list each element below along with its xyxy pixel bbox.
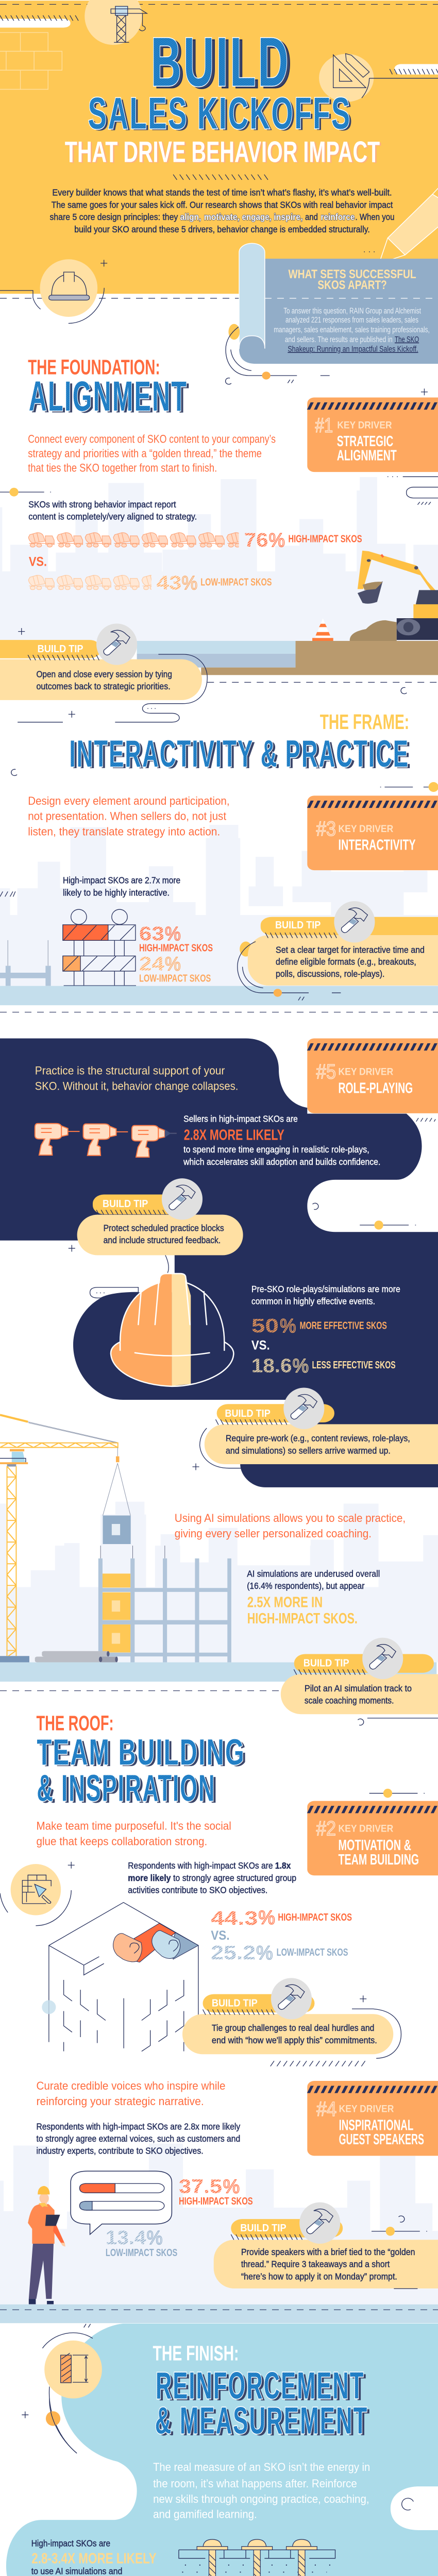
icon: screws <box>179 2539 335 2576</box>
text block: inspiration lead <box>36 2079 225 2108</box>
text block: inspiration lead: Curate credible voices who inspire while <box>36 2079 225 2092</box>
text block: external voices <box>36 2121 240 2156</box>
text block: intro: share 5 core design principles: they <box>49 212 178 222</box>
stat: 18.6 percent less effective: 18.6 <box>251 1354 292 1376</box>
illustration: ground, cone and excavator tracks <box>137 618 438 675</box>
text block: research note <box>274 307 430 353</box>
stat: 2.8x role-play <box>183 1113 380 1167</box>
decoration: spinner <box>402 2498 413 2510</box>
decoration: swirl line and plus <box>11 628 438 792</box>
text block: alignment stat intro <box>28 499 197 521</box>
stat: 50 percent more effective: % <box>280 1315 296 1336</box>
stat: 2.8-3.4x AI simulations: 2.8-3.4X MORE LIKELY <box>31 2550 157 2567</box>
text block: roof lead <box>36 1819 231 1848</box>
build tip: pre-work: BUILD TIP <box>225 1408 271 1419</box>
text block: intro: . When you <box>356 212 394 222</box>
heading: Alignment <box>29 374 190 421</box>
illustration: worker with tablet <box>28 2186 65 2304</box>
text block: alignment stat intro: SKOs with strong behavior impact report <box>28 499 176 510</box>
stat: 25.2 percent low-impact: LOW-IMPACT SKOS <box>277 1947 348 1958</box>
build tip: speaker brief <box>214 2202 438 2289</box>
text block: intro: reinforce <box>321 212 355 222</box>
build tip: pilot AI track: BUILD TIP <box>304 1657 349 1669</box>
panel: What sets successful SKOs apart <box>239 243 438 364</box>
stat: AI simulations 2.5x: (16.4% respondents), but appear <box>247 1580 364 1591</box>
stat: 37.5 percent high-impact: 37.5 <box>179 2175 222 2197</box>
icon: measuring wall <box>22 2324 102 2453</box>
text block: intro: align, <box>180 212 201 222</box>
background: skyline alignment <box>0 477 438 641</box>
text block: intro: inspire, <box>274 212 303 222</box>
decoration: top-left ruler <box>0 15 78 28</box>
divider dashes <box>0 1012 438 1013</box>
text block: frame lead: listen, they translate strategy into action. <box>28 825 220 838</box>
text: THE ROOF: <box>36 1711 114 1735</box>
stat: 44.3 percent high-impact: % <box>258 1906 275 1928</box>
card: #5 key driver: KEY DRIVER <box>338 1066 393 1077</box>
text block: intro: and <box>305 212 318 222</box>
build tip: scheduled practice <box>77 1178 243 1255</box>
background: skyline interactivity <box>0 825 438 986</box>
stat: 24 percent low-impact: 24 <box>139 953 164 975</box>
build tip: scheduled practice: BUILD TIP <box>103 1198 148 1210</box>
stat: 24 percent low-impact: % <box>165 953 181 975</box>
ground band with dashes <box>0 2304 438 2323</box>
build tip: open and close <box>0 623 202 700</box>
card: #4 key driver <box>307 2081 438 2156</box>
stat: 13.4 percent low-impact: LOW-IMPACT SKOS <box>106 2247 177 2259</box>
text block: foundation lead: strategy and priorities with a “golden thread,” the theme <box>28 447 262 460</box>
text: ALIGNMENT <box>29 374 188 420</box>
divider dashes <box>0 1690 281 1691</box>
text block: group activities: Respondents with high-impact SKOs are 1.8x <box>128 1860 291 1871</box>
card: #3 key driver: KEY DRIVER <box>338 823 393 834</box>
stat: 43 percent low-impact: 43 <box>157 572 181 594</box>
illustration: building frame under construction <box>0 1546 436 1682</box>
chart: speech bubble bars <box>71 2171 172 2234</box>
stat: AI simulations 2.5x: 2.5X MORE IN <box>247 1594 323 1611</box>
stat: 37.5 percent high-impact <box>179 2175 253 2207</box>
build tip: interactive time target <box>238 901 438 1001</box>
chart: barricade bars <box>63 909 136 986</box>
icon: three drills <box>35 1124 177 1157</box>
illustration: steel frame and ground <box>0 940 438 1005</box>
text: THE FINISH: <box>153 2342 239 2365</box>
card: #1 key driver <box>307 397 438 472</box>
stat: 43 percent low-impact: LOW-IMPACT SKOS <box>200 577 272 588</box>
text block: intro: motivate, <box>204 212 240 222</box>
text block: inspiration lead: reinforcing your strategic narrative. <box>36 2095 204 2108</box>
card: #1 key driver: KEY DRIVER <box>337 419 392 431</box>
icon: crane <box>85 0 147 45</box>
card: #2 key driver: KEY DRIVER <box>338 1823 393 1834</box>
stat: 63 percent high-impact: 63 <box>139 923 164 944</box>
text block: frame lead <box>28 794 230 838</box>
card: #3 key driver <box>307 795 438 870</box>
illustration: big hard hat <box>111 1274 233 1386</box>
stat: 13.4 percent low-impact: 13.4 <box>106 2227 146 2248</box>
stat: 76 percent high-impact: HIGH-IMPACT SKOS <box>288 533 362 545</box>
stat: 2.8x role-play: 2.8X MORE LIKELY <box>184 1126 284 1143</box>
decoration: hatch under title <box>173 175 268 180</box>
text block: external voices: industry experts, contribute to SKO objectives. <box>36 2145 204 2156</box>
stat: 76 percent high-impact: % <box>269 529 285 551</box>
stat: 25.2 percent low-impact <box>211 1942 348 1963</box>
stat: 25.2 percent low-impact: 25.2 <box>211 1942 256 1963</box>
text block: interactivity stat intro: likely to be highly interactive. <box>63 887 170 898</box>
stat: 50 percent more effective: 50 <box>251 1315 279 1336</box>
icon: brick and trowel <box>0 1862 75 1926</box>
heading: Team Building and Inspiration <box>37 1732 248 1811</box>
text: ALIGNMENT <box>31 375 190 421</box>
stat: 63 percent high-impact <box>139 923 213 954</box>
text block: practice lead <box>35 1064 238 1092</box>
background: skyline inspiration <box>0 2144 438 2304</box>
panel: hero background <box>0 1 438 298</box>
build tip: speaker brief: BUILD TIP <box>240 2223 287 2234</box>
build tip: pilot AI track <box>281 1638 438 1725</box>
stat: 18.6 percent less effective <box>251 1354 396 1376</box>
label: vs: VS. <box>211 1928 230 1943</box>
card: #1 key driver: #1 <box>315 414 333 437</box>
card: #2 key driver: #2 <box>316 1817 336 1840</box>
build tip: scheduled practice: Protect scheduled practice blocks <box>104 1223 224 1233</box>
stat: 24 percent low-impact: LOW-IMPACT SKOS <box>139 973 211 985</box>
card: #4 key driver: #4 <box>316 2097 336 2121</box>
build tip: group challenges <box>182 1978 401 2066</box>
stat: 13.4 percent low-impact: % <box>147 2227 163 2248</box>
decoration: white blob marks <box>313 1118 435 1230</box>
text block: practice lead: SKO. Without it, behavior change collapses. <box>35 1079 238 1092</box>
icon: hard hat <box>0 259 107 324</box>
stat: 44.3 percent high-impact <box>211 1906 352 1929</box>
stat: 2.8-3.4x AI simulations: High-impact SKOs are <box>31 2538 110 2548</box>
text block: finish lead <box>153 2461 370 2521</box>
stat: 76 percent high-impact <box>244 529 362 551</box>
text block: interactivity stat intro: High-impact SKOs are 2.7x more <box>63 875 180 886</box>
stat: 37.5 percent high-impact: HIGH-IMPACT SKOS <box>179 2196 253 2207</box>
illustration: isometric roof with rolls <box>42 1903 198 2052</box>
stat: 2.8-3.4x AI simulations: to use AI simulations and <box>31 2566 122 2576</box>
text block: intro <box>49 187 394 234</box>
build tip: scheduled practice: and include structured feedback. <box>104 1235 221 1245</box>
text block: roof lead: Make team time purposeful. It's the social <box>36 1819 231 1832</box>
card: #5 key driver: #5 <box>316 1060 336 1083</box>
stat: 37.5 percent high-impact: % <box>223 2175 240 2197</box>
build tip: pre-work <box>193 1388 438 1470</box>
decoration: lines by alignment stat <box>0 477 438 505</box>
label: vs: VS. <box>251 1338 270 1352</box>
decoration: line and dot <box>369 1789 425 1798</box>
stat: 25.2 percent low-impact: % <box>256 1942 273 1963</box>
build tip: group challenges: BUILD TIP <box>212 1997 258 2009</box>
card: #2 key driver <box>307 1801 438 1875</box>
stat: 63 percent high-impact: HIGH-IMPACT SKOS <box>139 942 213 954</box>
text block: foundation lead: that ties the SKO together from start to finish. <box>28 461 217 474</box>
text block: group activities: activities contribute to SKO objectives. <box>128 1885 267 1895</box>
text block: intro: engage, <box>242 212 272 222</box>
build tip: open and close: BUILD TIP <box>38 643 83 655</box>
chart: mixer truck pictogram high impact <box>28 533 252 547</box>
text block: frame lead: not presentation. When sellers do, not just <box>28 809 226 822</box>
stat: 2.8x role-play: Sellers in high-impact SKOs are <box>183 1113 298 1124</box>
panel: practice navy background <box>0 1038 438 1487</box>
text: THE FOUNDATION: <box>28 355 160 379</box>
text block: external voices: to strongly agree external voices, such as customers and <box>36 2133 240 2144</box>
text block: pre-SKO role-plays <box>251 1284 400 1307</box>
text block: foundation lead <box>28 432 276 474</box>
illustration: excavator <box>358 551 438 618</box>
stat: 43 percent low-impact <box>157 572 272 594</box>
text block: alignment stat intro: content is completely/very aligned to strategy. <box>28 511 197 521</box>
stat: 18.6 percent less effective: % <box>293 1354 309 1376</box>
decoration: scroll swirl <box>226 324 428 395</box>
build tip: interactive time target: BUILD TIP <box>275 920 321 931</box>
build tip: open and close: Open and close every session by tying <box>36 669 172 680</box>
text block: AI simulations lead <box>175 1512 406 1540</box>
decoration: brick wall outline <box>0 32 62 89</box>
title: Build <box>151 23 294 103</box>
icon: set square and pencil <box>319 54 438 102</box>
stat: 2.8-3.4x AI simulations <box>31 2538 157 2576</box>
stat: 63 percent high-impact: % <box>165 923 181 944</box>
panel: finish light-blue background <box>6 2324 438 2576</box>
label: vs: VS. <box>29 554 47 569</box>
stat: 13.4 percent low-impact <box>106 2227 177 2259</box>
heading: Reinforcement and Measurement <box>155 2364 370 2444</box>
build tip: open and close: outcomes back to strategic priorities. <box>36 681 171 691</box>
decoration: big pencil <box>364 187 438 264</box>
stat: 44.3 percent high-impact: 44.3 <box>211 1907 258 1929</box>
text block: group activities: more likely to strongly agree structured group <box>128 1873 296 1883</box>
text block: group activities <box>128 1860 296 1895</box>
card: #4 key driver: KEY DRIVER <box>339 2103 394 2114</box>
decoration: line into hard hat <box>69 1245 169 1298</box>
card: #3 key driver: #3 <box>316 817 336 840</box>
stat: AI simulations 2.5x <box>247 1568 380 1626</box>
stat: 76 percent high-impact: 76 <box>244 529 268 551</box>
panel: What sets successful SKOs apart: SKOS APART? <box>317 279 387 292</box>
text block: external voices: Respondents with high-impact SKOs are 2.8x more likely <box>36 2121 240 2132</box>
text block: roof lead: glue that keeps collaboration strong. <box>36 1835 207 1848</box>
text block: frame lead: Design every element around participation, <box>28 794 230 807</box>
card: #5 key driver <box>307 1038 438 1113</box>
background: skyline AI simulations <box>0 1502 438 1663</box>
stat: 24 percent low-impact <box>139 953 211 985</box>
illustration: tower crane <box>0 1415 131 1656</box>
stat: 44.3 percent high-impact: HIGH-IMPACT SKOS <box>278 1912 352 1923</box>
text block: interactivity stat intro <box>0 875 180 898</box>
text block: practice lead: Practice is the structural support of your <box>35 1064 225 1077</box>
stat: 43 percent low-impact: % <box>181 572 197 594</box>
chart: mixer truck pictogram low impact <box>28 575 167 590</box>
stat: 50 percent more effective <box>251 1315 387 1336</box>
text block: finish lead: and gamified learning. <box>153 2507 257 2521</box>
